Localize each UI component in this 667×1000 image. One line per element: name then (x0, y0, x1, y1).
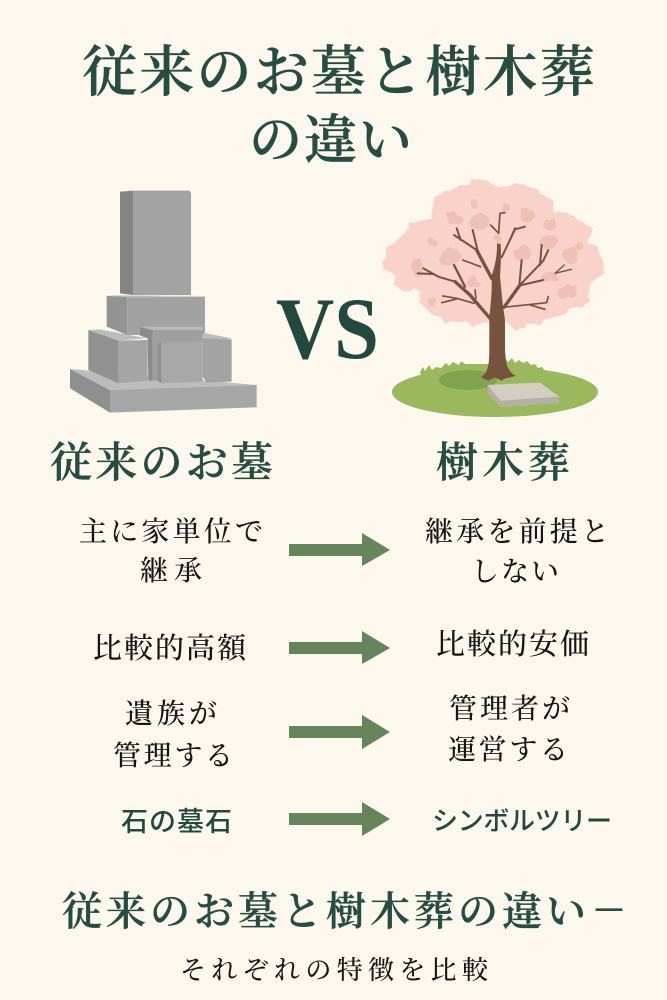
title (82, 42, 595, 170)
trunk and branches (418, 213, 572, 381)
text: traditional cost: 比較的高額 (93, 632, 247, 665)
heading: traditional grave: 従来のお墓 (50, 440, 273, 487)
row 3: management (113, 693, 570, 772)
memorial stone plaque (487, 383, 559, 407)
arrow (289, 631, 390, 664)
row 2: cost (93, 628, 589, 665)
caption: それぞれの特徴を比較 (180, 956, 489, 985)
text: traditional management: 管理する (113, 740, 233, 772)
arrow (289, 802, 390, 836)
blossom canopy (380, 180, 604, 330)
text: stone monument: 石の墓石 (121, 807, 232, 837)
row 1: succession (79, 516, 609, 588)
text: tree burial management: 運営する (448, 734, 568, 766)
subtitle: 従来のお墓と樹木葬の違い (62, 889, 586, 934)
blossom clusters (411, 200, 585, 308)
heading: VS: VS (276, 281, 379, 378)
icon: traditional gravestone (70, 191, 257, 413)
text: tree burial cost: 比較的安価 (436, 628, 589, 661)
heading: tree burial: 樹木葬 (436, 440, 570, 487)
text: tree burial succession (425, 516, 609, 588)
title: 従来のお墓と樹木葬 (82, 42, 595, 103)
text: tree burial management (448, 693, 570, 766)
grass mound (392, 358, 598, 417)
text: traditional management (113, 698, 233, 772)
arrow (289, 715, 390, 749)
text: traditional succession: 主に家単位で (79, 516, 263, 548)
text: traditional management: 遺族が (125, 698, 217, 730)
row 4: monument (121, 802, 612, 837)
text: traditional succession: 継承 (140, 555, 202, 587)
arrow (289, 533, 390, 566)
subtitle: – (595, 877, 623, 934)
text: tree burial management: 管理者が (449, 693, 570, 725)
text: symbol tree: シンボルツリー (432, 806, 612, 836)
text: tree burial succession: しない (471, 557, 559, 588)
text: tree burial succession: 継承を前提と (425, 516, 609, 548)
title: の違い (249, 112, 412, 170)
text: traditional succession (79, 516, 263, 587)
icon: cherry tree on grass (380, 180, 604, 417)
